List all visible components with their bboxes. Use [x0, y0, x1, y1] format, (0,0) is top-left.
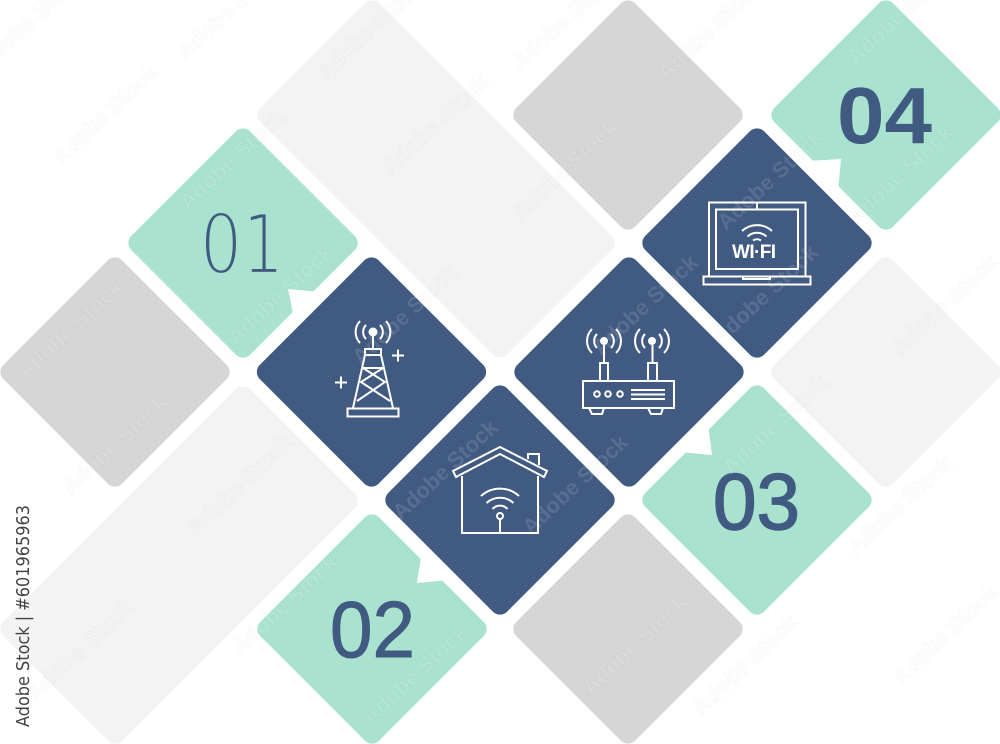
panel: step 02: [253, 510, 491, 744]
watermark pattern: Adobe Stock: [182, 429, 298, 540]
icon: router: [583, 329, 674, 414]
panel: gray tile bottom: [509, 510, 747, 744]
panel: navy tile laptop: [638, 124, 876, 362]
number 03: 03: [713, 457, 800, 546]
panel: navy tile home: [381, 381, 619, 619]
watermark pattern: Adobe Stock: [347, 259, 463, 370]
stock id label: Adobe Stock | #601965963: [13, 505, 34, 727]
panel: step 03: [638, 381, 876, 619]
watermark pattern: Adobe Stock: [227, 549, 343, 660]
number 04: 04: [837, 71, 933, 160]
watermark pattern: Adobe Stock: [174, 104, 290, 215]
watermark pattern: Adobe Stock: [717, 369, 833, 480]
watermark pattern: Adobe Stock: [842, 119, 958, 230]
panel: big light tile bottom: [0, 382, 362, 744]
panel: navy tile router: [510, 253, 748, 491]
watermark pattern: Adobe Stock: [577, 589, 693, 700]
watermark pattern: Adobe Stock: [12, 274, 128, 385]
panel: big light tile top: [253, 0, 619, 362]
number 02: 02: [330, 585, 415, 674]
watermark pattern: Adobe Stock: [507, 114, 623, 225]
panel: step 01: [124, 124, 362, 362]
watermark pattern: Adobe Stock: [712, 124, 828, 235]
icon: laptop wifi: [704, 202, 810, 284]
panel: light tile right: [767, 253, 1000, 491]
icon: home with wifi: [453, 447, 547, 533]
panel: navy tile tower: [253, 253, 490, 491]
panel: gray tile left: [0, 253, 234, 491]
panel: gray tile top: [509, 0, 747, 234]
number 01: 01: [200, 196, 284, 295]
watermark pattern: Adobe Stock: [887, 249, 1000, 360]
watermark pattern: Adobe Stock: [22, 594, 138, 705]
icon: cell tower: [335, 321, 404, 416]
watermark pattern: Adobe Stock: [47, 59, 163, 170]
label: WI-FI: WI·FI: [732, 242, 777, 263]
watermark pattern: Adobe Stock: [377, 69, 493, 180]
watermark pattern: Adobe Stock: [357, 619, 473, 730]
watermark pattern: Adobe Stock: [842, 449, 958, 560]
watermark pattern: Adobe Stock: [517, 429, 633, 540]
watermark pattern: Adobe Stock: [222, 239, 338, 350]
watermark pattern: Adobe Stock: [887, 579, 1000, 690]
panel: step 04: [767, 0, 1000, 234]
watermark pattern: Adobe Stock: [587, 249, 703, 360]
watermark pattern: Adobe Stock: [687, 609, 803, 720]
watermark pattern: Adobe Stock: [707, 239, 823, 350]
watermark pattern: Adobe Stock: [387, 414, 503, 525]
watermark pattern: Adobe Stock: [57, 389, 173, 500]
